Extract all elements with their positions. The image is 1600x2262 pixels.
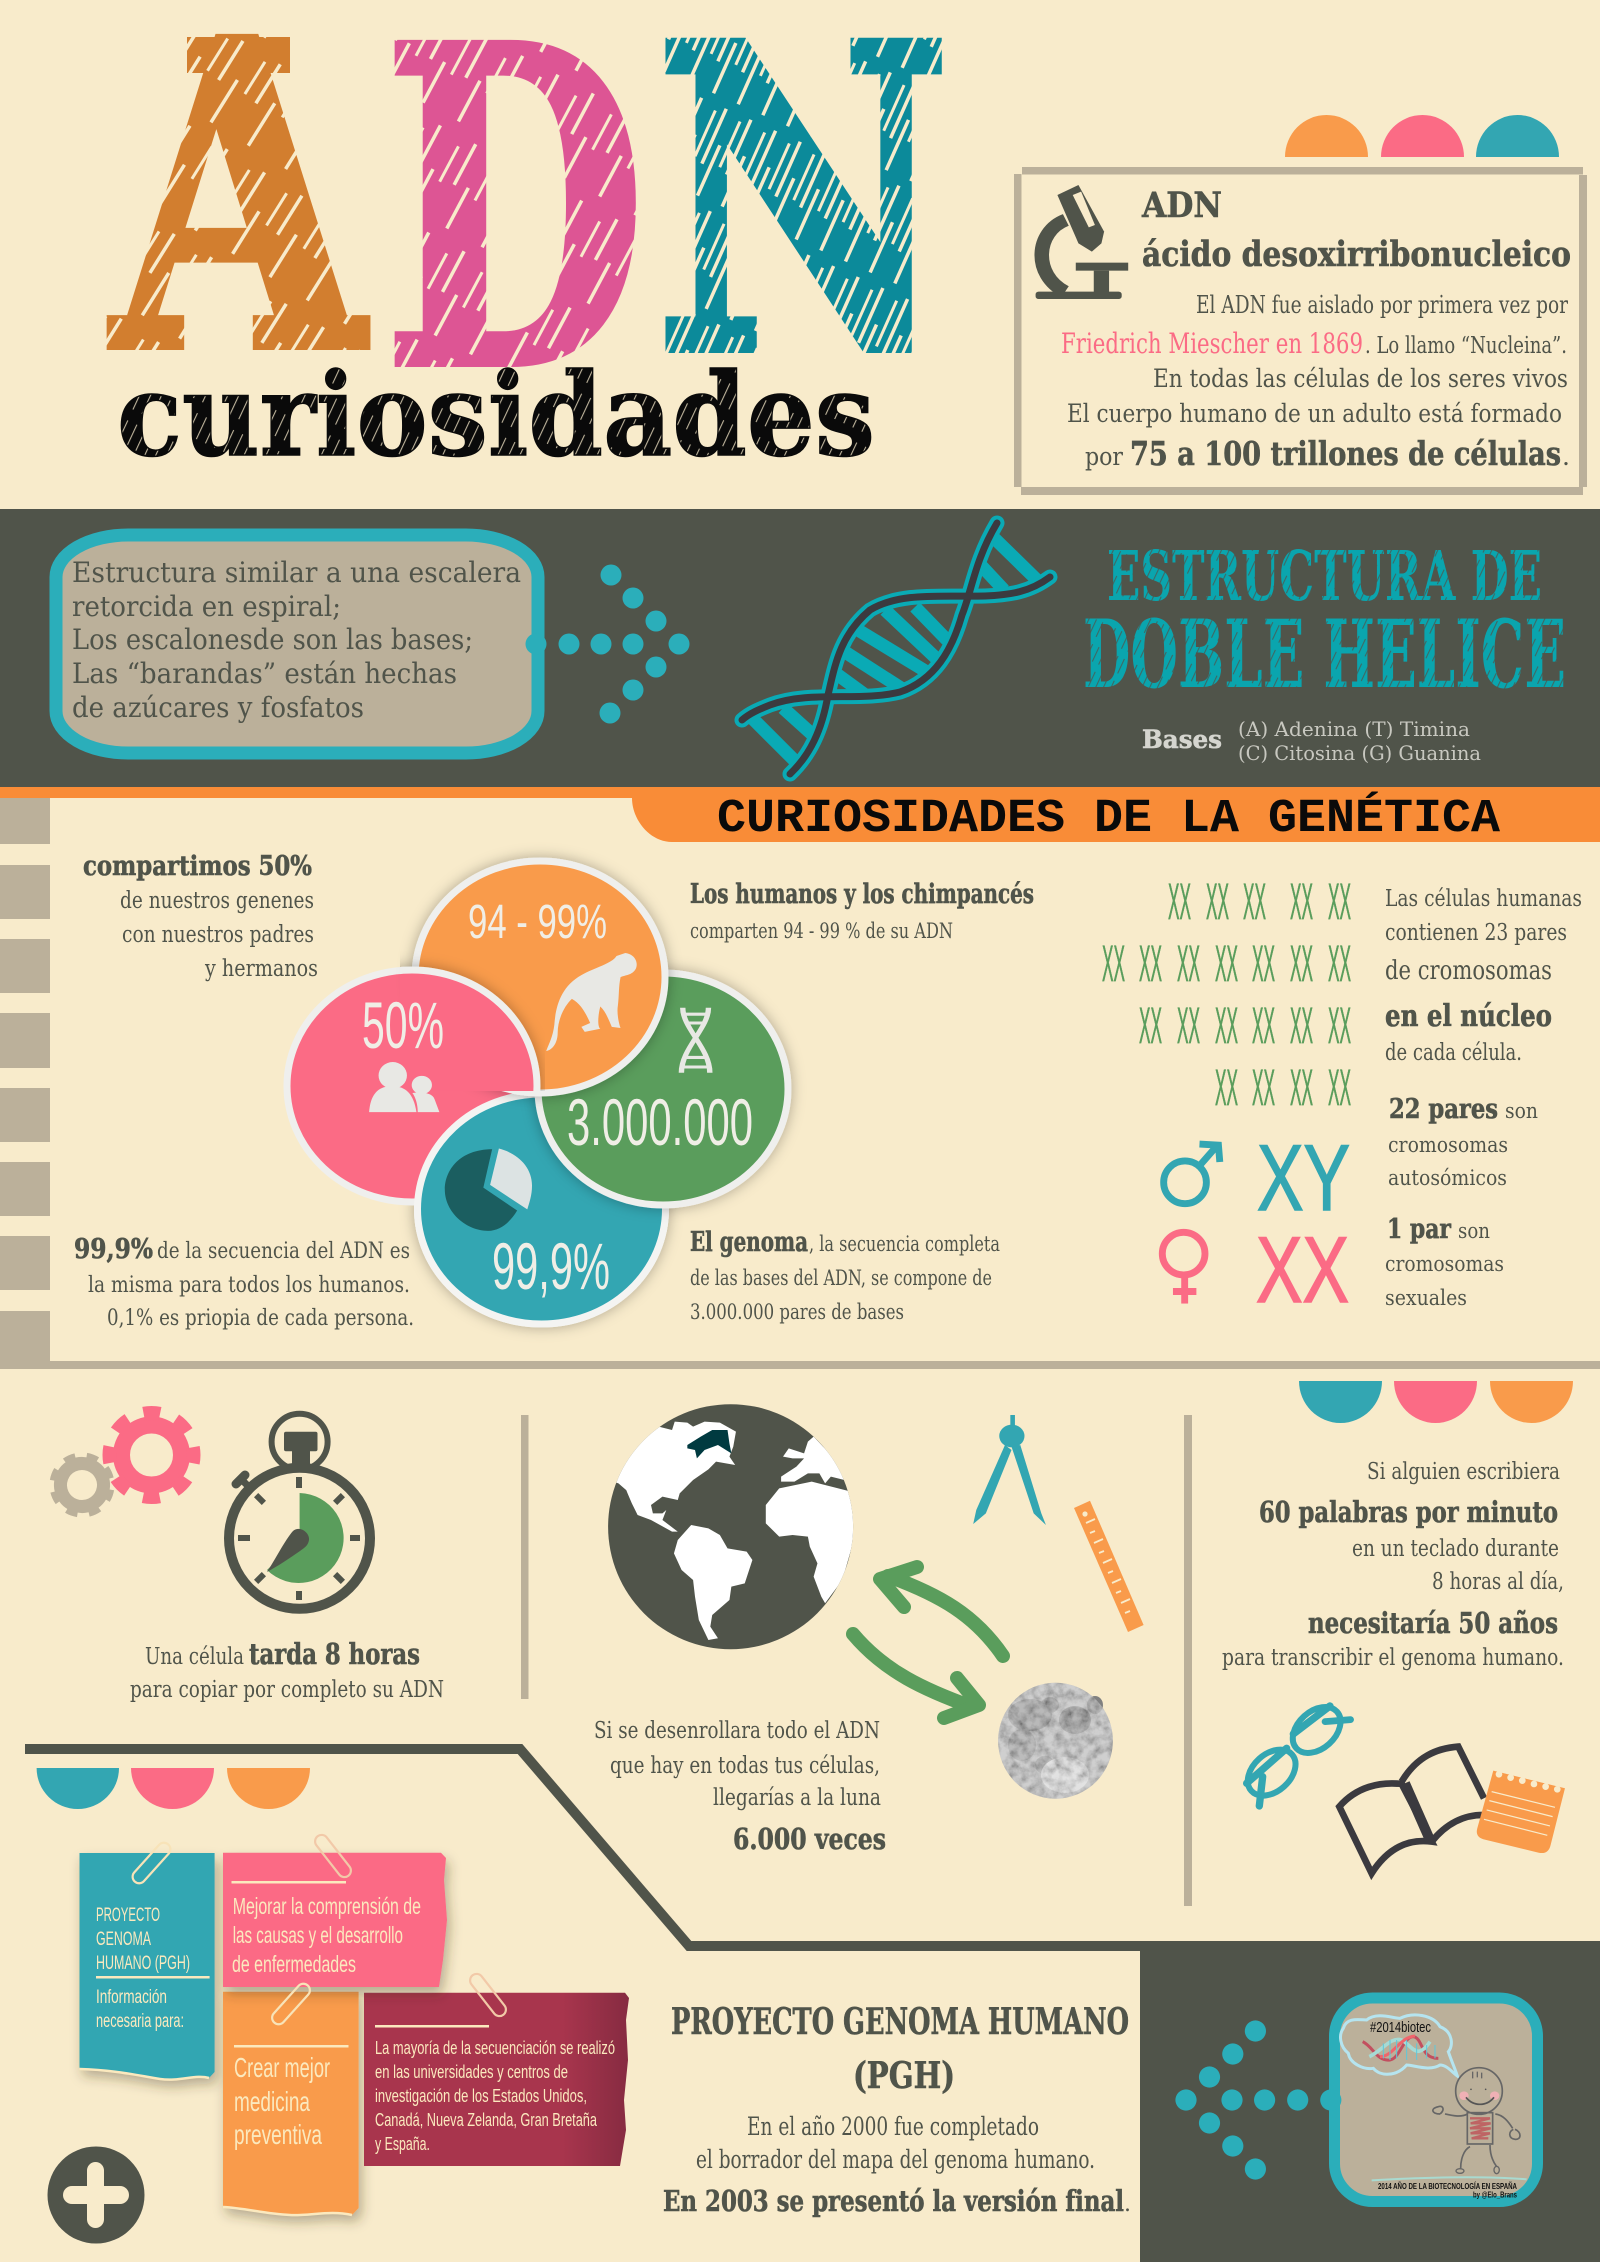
label: 99,9%: 99,9%: [492, 1229, 610, 1303]
arrow: dotted left: [1175, 2020, 1308, 2180]
text block: chimpances: Los humanos y los chimpancés: [690, 879, 1034, 910]
text block: cromosomas: de cada célula.: [1385, 1040, 1522, 1066]
chart: chromosome pairs: XX: [1290, 935, 1313, 992]
chart: chromosome pairs: XX: [1168, 873, 1191, 930]
divider: angled dark line: [25, 1749, 1145, 1946]
text block: proyecto genoma humano: el borrador del mapa del genoma humano.: [696, 2145, 1095, 2174]
note: pink enfermedades: las causas y el desarrollo: [233, 1922, 403, 1948]
text block: history: Friedrich Miescher en 1869: [1061, 327, 1363, 360]
text block: luna: llegarías a la luna: [713, 1785, 881, 1811]
label: 50%: 50%: [362, 988, 444, 1062]
text block: compartimos 50%: compartimos 50%: [83, 851, 312, 882]
text block: luna: Si se desenrollara todo el ADN: [594, 1718, 880, 1744]
note: teal PGH: Información: [96, 1987, 167, 2008]
circle: pink overlap: [400, 958, 545, 1091]
text block: 99,9%: [74, 1234, 414, 1331]
panel: ADN definition: [1014, 167, 1587, 495]
icon: open book: [1339, 1747, 1484, 1873]
label: XY: XY: [1257, 1125, 1350, 1230]
note: orange medicina: medicina: [234, 2086, 310, 2117]
note: maroon secuenciacion: y España.: [375, 2134, 430, 2154]
chart: chromosome pairs: XX: [1215, 1059, 1238, 1116]
icon: monkey: [546, 953, 637, 1051]
icon: female symbol: [1162, 1232, 1205, 1304]
circle: teal overlap: [418, 1094, 666, 1324]
text block: cromosomas: sexuales: [1385, 1286, 1467, 1310]
icon: male symbol: [1164, 1144, 1220, 1204]
text block: 99,9%: la misma para todos los humanos.: [88, 1273, 410, 1298]
header band: curiosidades de la genetica: [0, 787, 1600, 846]
text block: cromosomas: de cromosomas: [1385, 956, 1552, 986]
circle: orange 94-99%: [415, 861, 665, 1093]
note: pink enfermedades: de enfermedades: [232, 1951, 356, 1977]
note: pink enfermedades: [223, 1853, 447, 1987]
text block: proyecto genoma humano: En el año 2000 fue completado: [747, 2112, 1039, 2141]
heading: estructura de doble helice: [1083, 537, 1566, 710]
chart: chromosome pairs: XX: [1139, 997, 1162, 1054]
text block: 99,9%: de la secuencia del ADN es: [157, 1239, 410, 1264]
decorative half circles lower left: [37, 1768, 310, 1809]
text block: tarda 8 horas: tarda 8 horas: [249, 1637, 420, 1671]
decorative half circles top right: [1285, 115, 1559, 157]
icon: gears: [46, 1413, 193, 1521]
chart: chromosome pairs: XX: [1252, 935, 1275, 992]
label: XX: XX: [1256, 1217, 1349, 1322]
arrow: moon to earth: [880, 1567, 1003, 1656]
text block: luna: que hay en todas tus células,: [610, 1753, 880, 1779]
chart: overlapping circles: [287, 861, 788, 1324]
text block: proyecto genoma humano: .: [1124, 2192, 1131, 2217]
callout: helix description: [56, 535, 538, 753]
illustration: mascot figure with cloud: [1341, 2015, 1527, 2180]
icon: DNA double helix: [742, 523, 1050, 774]
icon: stopwatch: [229, 1414, 370, 1609]
icon: paperclips: [130, 1832, 509, 2027]
legend: bases: (C) Citosina (G) Guanina: [1238, 742, 1481, 765]
text block: history: [1061, 290, 1570, 473]
circle: green 3.000.000: [538, 973, 788, 1205]
text block: history: .: [1562, 442, 1570, 471]
label: 3.000.000: 3.000.000: [567, 1085, 753, 1159]
caption: [1378, 2181, 1517, 2200]
chart: chromosome pairs: XX: [1177, 997, 1200, 1054]
note: teal PGH: PROYECTO: [96, 1905, 160, 1926]
text block: compartimos 50%: y hermanos: [204, 956, 318, 982]
text block: 99,9%: 0,1% es priopia de cada persona.: [107, 1306, 414, 1331]
text block: proyecto genoma humano: PROYECTO GENOMA HUMANO: [671, 2001, 1129, 2043]
icon: people: [369, 1062, 439, 1112]
title: ADN: [108, 0, 950, 465]
label: 94-99%: 94 - 99%: [468, 896, 607, 949]
text block: proyecto genoma humano: (PGH): [853, 2055, 955, 2097]
left stripes and bottom rule: [0, 798, 1600, 1369]
text block: tarda 8 horas: para copiar por completo su ADN: [130, 1677, 444, 1703]
chart: chromosome pairs: XX: [1290, 873, 1313, 930]
text block: luna: [594, 1718, 886, 1856]
legend: bases: [1142, 718, 1481, 765]
icon: plus: [48, 2146, 144, 2244]
text block: el genoma: , la secuencia completa: [809, 1232, 1000, 1256]
icon: notepad: [1477, 1771, 1565, 1853]
arrow: dotted right: [526, 564, 690, 724]
text block: cromosomas: [1385, 886, 1582, 1310]
icon: microscope: [1036, 185, 1128, 299]
text block: 99,9%: 99,9%: [74, 1234, 153, 1265]
callout: helix description: de azúcares y fosfatos: [72, 691, 364, 724]
text block: history: por: [1085, 442, 1123, 471]
text block: chimpances: comparten 94 - 99 % de su ADN: [690, 919, 953, 943]
circle: pink 50%: [287, 970, 537, 1202]
text block: cromosomas: son: [1458, 1219, 1490, 1243]
caption: 2014 AÑO DE LA BIOTECNOLOGÍA EN ESPAÑA: [1378, 2181, 1517, 2191]
text block: cromosomas: en el núcleo: [1385, 999, 1552, 1034]
heading: [1141, 185, 1571, 275]
decorative half circles right: [1299, 1381, 1573, 1423]
note: maroon secuenciacion: Canadá, Nueva Zelanda, Gran Bretaña: [375, 2110, 598, 2130]
panel: mascot: [1320, 1998, 1538, 2202]
text block: luna: 6.000 veces: [733, 1822, 886, 1856]
chart: chromosome pairs: XX: [1252, 997, 1275, 1054]
callout: helix description: Los escalonesde son las bases;: [72, 623, 473, 656]
note: teal PGH: necesaria para:: [96, 2011, 184, 2032]
text block: proyecto genoma humano: En 2003 se presentó la versión final: [663, 2184, 1124, 2218]
chart: chromosome pairs: XX: [1139, 935, 1162, 992]
icon: glasses: [1239, 1698, 1351, 1806]
text block: 60 palabras: 8 horas al día,: [1432, 1569, 1564, 1595]
callout: helix description: Estructura similar a una escalera: [72, 556, 521, 589]
chart: chromosome pairs: XX: [1243, 873, 1266, 930]
text block: compartimos 50%: [83, 851, 318, 982]
text block: el genoma: [690, 1227, 1000, 1324]
subtitle: curiosidades: curiosidades: [117, 348, 875, 482]
note: teal PGH: [80, 1853, 215, 2080]
chart: chromosome pairs: [1102, 873, 1351, 1116]
infographic canvas: XX: [1328, 935, 1351, 992]
legend: bases: Bases: [1142, 725, 1222, 754]
icon: ruler: [1074, 1501, 1144, 1632]
note: orange medicina: [223, 1992, 359, 2215]
note: orange medicina: Crear mejor: [234, 2052, 330, 2083]
icon: small DNA: [681, 1008, 710, 1073]
icon: globe: [608, 1404, 858, 1649]
caption: by @Elo_Brans: [1473, 2190, 1517, 2200]
note: teal PGH: GENOMA: [96, 1929, 151, 1950]
text block: cromosomas: 22 pares: [1389, 1094, 1498, 1125]
text block: tarda 8 horas: [130, 1637, 444, 1703]
text block: cromosomas: autosómicos: [1388, 1166, 1507, 1190]
text block: compartimos 50%: con nuestros padres: [122, 922, 314, 948]
callout: helix description: Las “barandas” están hechas: [72, 657, 457, 690]
text block: el genoma: 3.000.000 pares de bases: [690, 1300, 904, 1324]
text block: chimpances: [690, 879, 1034, 943]
label: hashtag: #2014biotec: [1370, 2020, 1431, 2036]
text block: proyecto genoma humano: [663, 2001, 1131, 2218]
icon: moon: [998, 1683, 1113, 1799]
text block: el genoma: El genoma: [690, 1227, 808, 1258]
dark band: double helix: [0, 509, 1600, 787]
icons in circles: [369, 953, 710, 1231]
note: orange medicina: preventiva: [234, 2119, 322, 2150]
icon: pie chart: [445, 1149, 532, 1231]
text block: compartimos 50%: de nuestros genenes: [120, 888, 314, 914]
infographic canvas: XX: [1328, 873, 1351, 930]
chart: chromosome pairs: XX: [1252, 1059, 1275, 1116]
arrow: earth to moon: [853, 1634, 979, 1718]
infographic canvas: XX: [1328, 1059, 1351, 1116]
note: pink enfermedades: Mejorar la comprensión de: [233, 1893, 421, 1919]
chart: chromosome pairs: XX: [1215, 997, 1238, 1054]
note: teal PGH: HUMANO (PGH): [96, 1953, 190, 1974]
text block: cromosomas: cromosomas: [1388, 1133, 1508, 1157]
circle: teal 99,9%: [418, 1094, 666, 1324]
dark corner panel: [1140, 1941, 1600, 2262]
text block: cromosomas: 1 par: [1387, 1214, 1452, 1245]
note: maroon secuenciacion: en las universidades y centros de: [375, 2062, 568, 2082]
callout: helix description: retorcida en espiral;: [72, 590, 341, 623]
chart: chromosome pairs: XX: [1206, 873, 1229, 930]
chart: chromosome pairs: XX: [1102, 935, 1125, 992]
text block: tarda 8 horas: Una célula: [145, 1644, 244, 1670]
chart: chromosome pairs: XX: [1290, 997, 1313, 1054]
header band: curiosidades de la genetica: CURIOSIDADES DE LA GENÉTICA: [717, 792, 1501, 846]
chart: chromosome pairs: XX: [1215, 935, 1238, 992]
text block: 60 palabras: [1222, 1459, 1564, 1671]
chart: chromosome pairs: XX: [1290, 1059, 1313, 1116]
note: maroon secuenciacion: [364, 1993, 629, 2166]
legend: bases: (A) Adenina (T) Timina: [1238, 718, 1470, 741]
icon: compass: [973, 1415, 1046, 1525]
infographic canvas: XX: [1328, 997, 1351, 1054]
heading: ADN: [1141, 185, 1222, 226]
chart: chromosome pairs: XX: [1177, 935, 1200, 992]
text block: cromosomas: son: [1505, 1099, 1538, 1123]
note: maroon secuenciacion: La mayoría de la secuenciación se realizó: [375, 2038, 615, 2058]
text block: cromosomas: cromosomas: [1385, 1252, 1504, 1276]
note: maroon secuenciacion: investigación de los Estados Unidos,: [375, 2086, 587, 2106]
text block: el genoma: de las bases del ADN, se compone de: [690, 1266, 992, 1290]
